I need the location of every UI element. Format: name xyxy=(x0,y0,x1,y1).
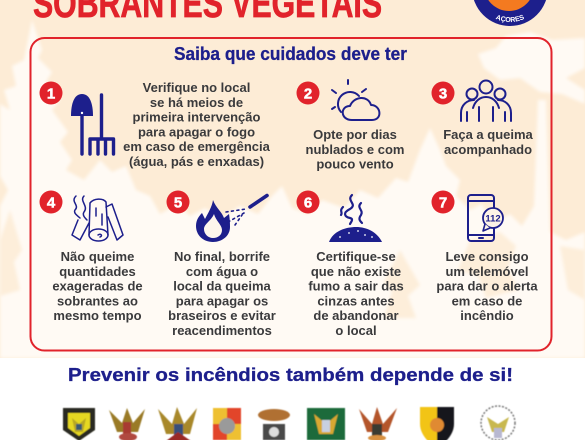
crest 9 xyxy=(481,406,515,440)
text: step 1: para apagar o fogo xyxy=(138,124,255,139)
white lower band xyxy=(0,358,585,440)
badge 4 xyxy=(40,190,62,214)
text: step 2: Opte por dias xyxy=(313,127,397,142)
text: step 1: primeira intervenção xyxy=(133,110,260,125)
crest 7 xyxy=(359,407,397,440)
text: step 6: fumo a sair das xyxy=(308,279,404,294)
text: step 5: local da queima xyxy=(173,279,272,294)
crest 8 xyxy=(420,407,454,440)
text: step 2 xyxy=(306,127,404,172)
icon: logs xyxy=(72,196,123,241)
badge 6: 6 xyxy=(304,194,312,212)
crest 2 xyxy=(109,408,145,440)
text: step 4: quantidades xyxy=(59,264,136,279)
crest 3 xyxy=(158,407,197,440)
text: step 7: um telemóvel xyxy=(445,264,529,279)
badge 5 xyxy=(166,190,190,214)
text: step 4: sobrantes ao xyxy=(57,293,138,308)
text: step 3 xyxy=(443,127,534,157)
badge 7 xyxy=(432,190,454,214)
icon: shovel and rake xyxy=(71,94,114,154)
badge 3 xyxy=(432,82,454,104)
text: step 5: braseiros e evitar xyxy=(168,308,276,323)
icon: phone with 112 xyxy=(468,195,503,241)
text: step 5: No final, borrife xyxy=(174,249,270,264)
icon: smoke over ashes xyxy=(329,195,382,242)
text: step 3: Faça a queima xyxy=(443,127,534,142)
icon: group of people xyxy=(461,80,511,121)
icon: sun and cloud xyxy=(332,80,379,120)
badge 5: 5 xyxy=(174,194,182,212)
panel: care tips xyxy=(30,38,552,350)
text: step 6: que não existe xyxy=(311,264,401,279)
text: step 1: Verifique no local xyxy=(143,80,250,95)
faint peach patches among the trees xyxy=(0,210,585,318)
pale forest silhouette xyxy=(0,20,585,358)
badge 7: 7 xyxy=(439,194,447,212)
badge 2 xyxy=(296,82,320,104)
text: step 4: exageradas de xyxy=(52,279,143,294)
text: step 5 xyxy=(168,249,276,338)
badge 1 xyxy=(40,82,62,104)
text: step 2: pouco vento xyxy=(316,157,394,172)
badge 3: 3 xyxy=(439,86,447,102)
logo: Protecao Civil Acores xyxy=(474,0,546,26)
slogan: Prevenir os incêndios também depende de si! xyxy=(68,364,513,385)
text: step 2: nublados e com xyxy=(306,142,404,157)
text: step 5: com água o xyxy=(186,264,258,279)
crest 6 xyxy=(307,408,345,440)
text: step 6: Certifique-se xyxy=(316,249,396,264)
text: step 4: mesmo tempo xyxy=(53,308,142,323)
text: step 7: incêndio xyxy=(460,308,514,323)
text: step 4 xyxy=(52,249,143,323)
crest 1 xyxy=(63,408,95,440)
text: step 6: de abandonar xyxy=(313,308,399,323)
text: step 1: (água, pás e enxadas) xyxy=(129,154,264,169)
badge 1: 1 xyxy=(47,86,55,102)
icon: flame and sprayer xyxy=(196,196,267,242)
text: step 5: reacendimentos xyxy=(172,323,272,338)
text: step 7: Leve consigo xyxy=(445,249,529,264)
crest 4 xyxy=(213,408,241,440)
panel heading: Saiba que cuidados deve ter xyxy=(174,44,407,64)
text: step 7: para dar o alerta xyxy=(436,279,538,294)
logo: Protecao Civil Acores: AÇORES xyxy=(496,14,524,23)
badge 6 xyxy=(296,190,320,214)
text: step 3: acompanhado xyxy=(444,142,532,157)
text: step 6: cinzas antes xyxy=(317,293,395,308)
text: step 7 xyxy=(436,249,538,323)
crest 5 xyxy=(258,409,290,440)
text: step 6: o local xyxy=(335,323,377,338)
text: step 1: se há meios de xyxy=(150,95,243,110)
badge 2: 2 xyxy=(304,86,312,102)
text: step 7: em caso de xyxy=(452,293,522,308)
logo row: fire brigade crests xyxy=(63,406,515,440)
text: step 1 xyxy=(123,80,271,169)
text: step 1: em caso de emergência xyxy=(123,139,271,154)
text: step 6 xyxy=(308,249,404,338)
badge 4: 4 xyxy=(47,194,56,212)
text: step 5: para apagar os xyxy=(176,293,268,308)
icon: phone with 112: 112 xyxy=(485,214,501,224)
text: step 4: Não queime xyxy=(61,249,134,264)
